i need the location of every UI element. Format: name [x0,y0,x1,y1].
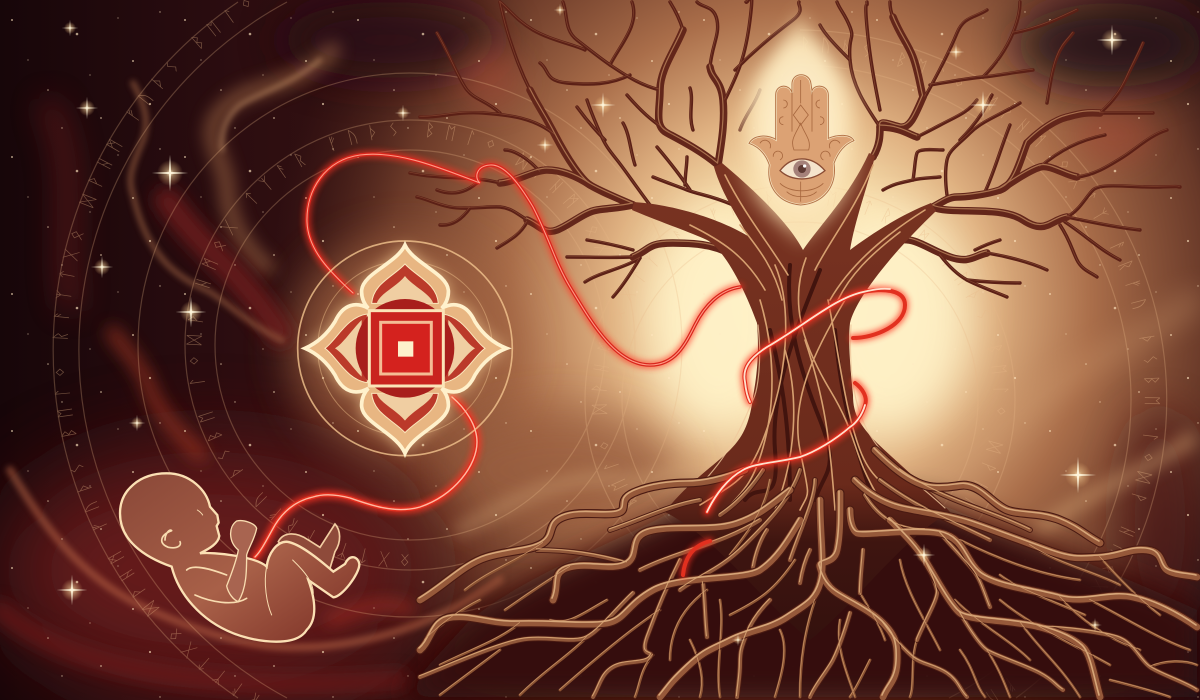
baby in the womb [120,473,359,642]
icon: hamsa hand with eye [749,75,854,205]
root chakra symbol [298,241,512,456]
baby body [120,473,359,642]
tree branches [410,0,1180,297]
baby far leg [278,524,340,568]
chakra petals [305,245,507,453]
tree trunk [632,153,950,640]
chakra red circle [356,299,454,398]
baby arm and hand [227,521,257,602]
red thread: around trunk [683,289,905,575]
red thread: chakra to baby [255,397,477,557]
chakra outer circles [298,241,512,456]
tree of life [400,0,1197,697]
chakra red petal insets [325,264,485,433]
red thread: chakra to tree [307,154,740,365]
chakra petal glow [305,245,507,453]
rune rings: ᛟᚷᛏᛉ ᚨᚱᚠᚢ ᚦᛊᛒᛖ ᛚᛜᛞᚹ ᚺᛗᛟᚷ ᛏᛉᚨᚱ ᚠᚢᚦᛊ ᛒᛖᛚᛜ ᛞᚹᚺᛗ ᛟᚷᛏᛉ [186,122,597,568]
chakra centre square [398,341,413,357]
chakra square [369,311,443,386]
rune rings: ᛏᚱᛉᛗ ᚠᚢᚦᛊ ᛒᛖᛚᛜ ᛞᚹᚺᛗ ᛟᚷᛏᛉ ᚨᚱᚠᚢ ᚦᛊᛒᛖ ᛏᚱᛉᛗ ᚠᚢᚦᛊ ᛒᛖᛚᛜ ᛞᚹᚺᛗ [592,200,1008,511]
baby details [162,510,313,615]
root zone shadow [400,500,1197,697]
tree roots [419,448,1197,697]
halo behind hamsa [732,0,868,252]
